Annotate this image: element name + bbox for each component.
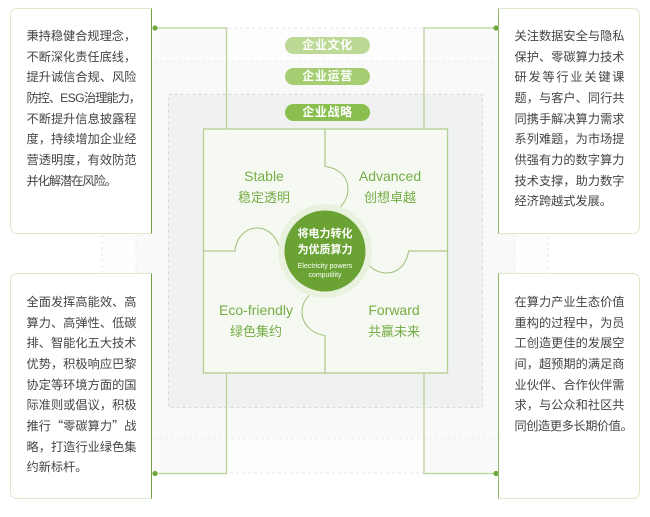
panel: top-right technology text: 供强有力的数字算力 [514,150,624,168]
pill: corporate operations: 企业运营 [302,69,353,83]
pill: corporate culture [285,37,370,54]
panel: bottom-right ecosystem text: 在算力产业生态价值 [514,292,624,310]
panel: top-right technology text [498,8,640,234]
panel: bottom-left environment text: 略，打造行业绿色集 [26,437,136,455]
panel: top-left governance text [10,8,152,234]
panel: top-right technology text: 技术支撑，助力数字 [514,171,624,189]
panel: bottom-right ecosystem text: 工创造更佳的发展空 [514,333,624,351]
panel: top-left governance text: 不断提升信息披露程 [26,109,136,127]
panel: bottom-left environment text [10,273,152,499]
panel: top-left governance text: 秉持稳健合规理念， [26,26,136,44]
panel: top-left governance text: 营透明度，有效防范 [26,150,136,168]
panel: top-right technology text: 关注数据安全与隐私 [514,26,624,44]
center circle text: computility [308,272,342,278]
panel: top-right technology text: 系列难题，为市场提 [514,129,624,147]
label: Advanced [359,168,421,205]
panel: top-left governance text: 提升诚信合规、风险 [26,67,136,85]
label: Stable: Stable [244,168,284,184]
panel: bottom-right ecosystem text: 业伙伴、合作伙伴需 [514,375,624,393]
panel: top-left governance text: 不断深化责任底线， [26,47,136,65]
panel: bottom-right ecosystem text: 重构的过程中，为员 [514,313,624,331]
panel: bottom-left environment text: 推行“零碳算力”战 [26,416,136,434]
label: Forward: Forward [368,302,420,318]
panel: top-right technology text: 保护、零碳算力技术 [514,47,624,65]
panel: bottom-right ecosystem text: 同创造更多长期价值。 [514,416,632,434]
panel: bottom-right ecosystem text: 间，超预期的满足商 [514,354,624,372]
center circle text [298,228,352,278]
panel: top-right technology text: 同携手解决算力需求 [514,109,624,127]
pill: corporate culture: 企业文化 [302,38,353,52]
panel: bottom-left environment text: 际准则或倡议，积极 [26,395,136,413]
panel: bottom-left environment text: 排、智能化五大技术 [26,333,136,351]
panel: bottom-left environment text: 优势，积极响应巴黎 [26,354,136,372]
label: Advanced: Advanced [359,168,421,184]
panel: bottom-left environment text: 全面发挥高能效、高 [26,292,136,310]
panel: top-right technology text: 经济跨越式发展。 [514,191,612,209]
panel: bottom-left environment text: 协定等环境方面的国 [26,375,136,393]
panel: top-right technology text: 题，与客户、同行共 [514,88,624,106]
pill: corporate strategy: 企业战略 [302,105,353,119]
panel: bottom-right ecosystem text: 求，与公众和社区共 [514,395,624,413]
label: Stable [238,168,290,205]
center circle text: 为优质算力 [298,244,352,256]
center circle text: 将电力转化 [298,228,352,240]
panel: bottom-left environment text: 约新标杆。 [26,457,87,475]
panel: top-left governance text: 防控、ESG治理能力， [26,88,140,106]
pill: corporate strategy [285,104,370,121]
label: Eco-friendly: 绿色集约 [230,324,282,339]
label: Advanced: 创想卓越 [364,190,416,205]
panel: bottom-right ecosystem text [498,273,640,499]
center circle text: Electricity powers [298,263,352,270]
label: Eco-friendly: Eco-friendly [219,302,293,318]
label: Forward [368,302,420,339]
panel: top-right technology text: 研发等行业关键课 [514,67,624,85]
panel: top-left governance text: 并化解潜在风险。 [26,171,116,189]
pill: corporate operations [285,68,370,85]
panel: bottom-left environment text: 算力、高弹性、低碳 [26,313,136,331]
label: Forward: 共赢未来 [368,324,420,339]
panel: top-left governance text: 度，持续增加企业经 [26,129,136,147]
label: Stable: 稳定透明 [238,190,290,205]
label: Eco-friendly [219,302,293,339]
